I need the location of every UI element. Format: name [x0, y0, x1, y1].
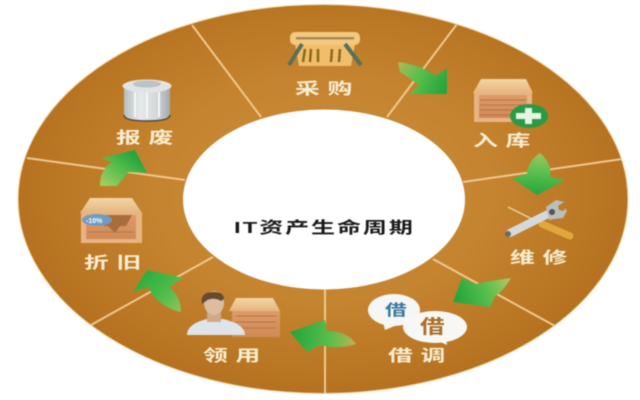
label: 报废: 报废 — [116, 129, 181, 147]
arrow: repair to lending — [453, 278, 511, 307]
icon: wrench and screwdriver — [505, 200, 570, 237]
label: 领用: 领用 — [203, 347, 268, 365]
icon: speech bubbles: 借 — [385, 301, 407, 318]
icon: depreciated crate: -10% — [86, 218, 103, 225]
icon: person with crate — [187, 291, 280, 337]
label: 采购: 采购 — [295, 80, 360, 98]
icon: trash can — [122, 80, 172, 121]
arrow: purchase to warehouse — [398, 62, 447, 94]
icon: depreciated crate — [80, 198, 142, 243]
label: 入库: 入库 — [473, 132, 538, 150]
icon: speech bubbles: 借 — [420, 316, 445, 337]
icon: shopping basket — [289, 32, 361, 66]
title: IT资产生命周期 — [234, 218, 415, 237]
icon: speech bubbles — [368, 294, 467, 345]
label: 折旧: 折旧 — [84, 254, 149, 272]
label: 借调: 借调 — [388, 347, 453, 365]
label: 维修: 维修 — [510, 249, 575, 267]
arrow: warehouse to repair — [512, 153, 565, 195]
icon: crate with plus badge — [473, 79, 548, 128]
arrow: lending to use — [290, 320, 356, 352]
arrow: use to depreciation — [133, 270, 183, 312]
arrow: depreciation to scrap — [100, 150, 147, 186]
center hub — [183, 110, 465, 290]
